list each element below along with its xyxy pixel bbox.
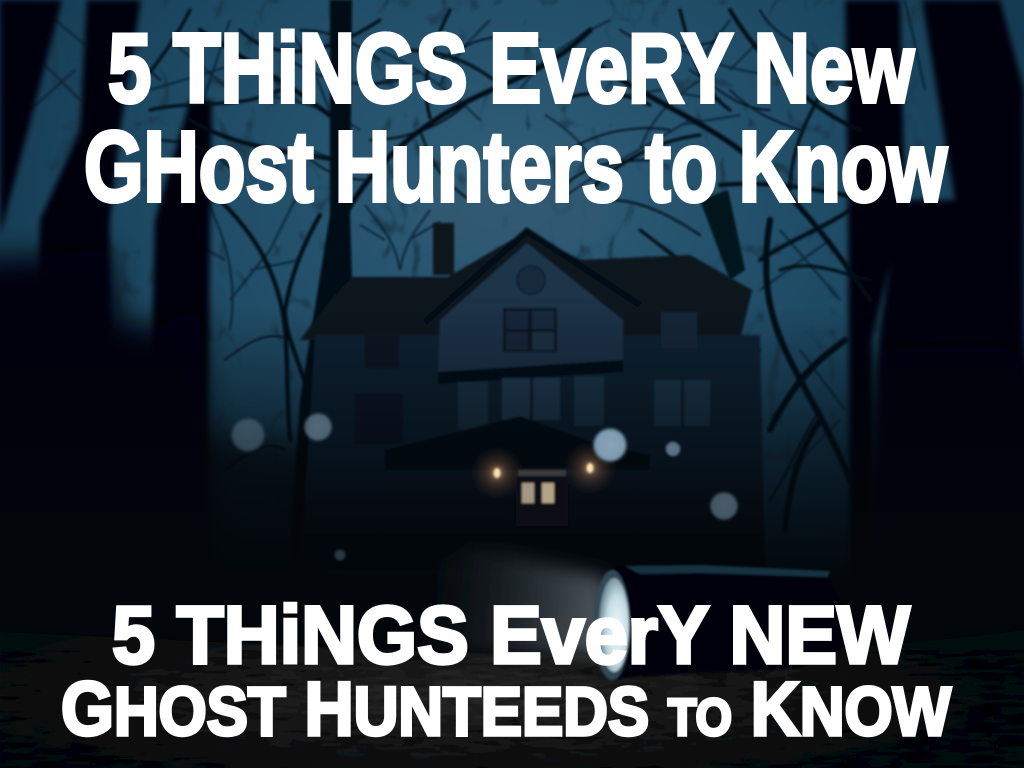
background: branch network over the sky: [0, 0, 1024, 560]
bottom title line 2: GHOST HUNTEEDS TO KNOW: [61, 667, 952, 752]
chimney: [433, 223, 454, 275]
flashlight beam: [420, 545, 608, 655]
wall lamp glow right: [562, 440, 618, 496]
upper window: [503, 308, 557, 352]
top title: [84, 13, 947, 223]
gable facade: [438, 243, 623, 372]
upper side windows: [365, 312, 697, 368]
flashlight lens: [594, 570, 630, 680]
middle band: [438, 360, 623, 384]
round attic window: [517, 266, 545, 294]
front door: [516, 468, 568, 526]
flashlight body: [612, 565, 862, 680]
middle windows: [355, 376, 710, 444]
wall lamp glow left: [469, 445, 525, 501]
right trunks: [845, 0, 905, 620]
porch roof: [385, 416, 650, 470]
flashlight: [594, 565, 862, 680]
spirit orbs: [230, 412, 739, 561]
haunted house: [300, 223, 765, 570]
ground: [0, 630, 1024, 768]
house roof: [300, 231, 752, 340]
front porch lights and door: [469, 440, 618, 526]
gable trim: [425, 231, 640, 322]
tree trunks and branches near the house: [110, 0, 870, 620]
house body: [300, 335, 765, 570]
background: fine distant branches: [30, 0, 925, 470]
background: bright gap in the sky behind the house: [415, 177, 605, 253]
forest darkness: left and right shadow masses: [0, 250, 1024, 660]
wall lamps: [494, 463, 594, 478]
bottom title: [61, 590, 952, 752]
bottom title line 1: 5 THiNGS EverY NEW: [112, 590, 911, 681]
left trunks: [0, 0, 62, 235]
